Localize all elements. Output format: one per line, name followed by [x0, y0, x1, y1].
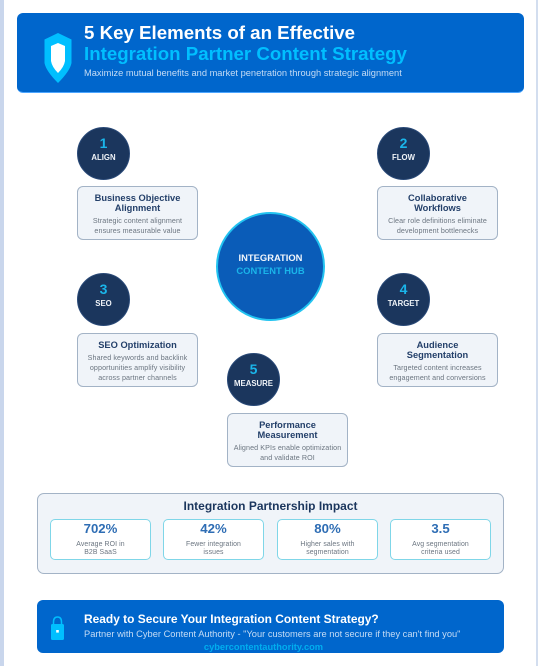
element 5 card: Performance [259, 420, 316, 430]
element 4 badge [377, 273, 430, 326]
element 1 badge [77, 127, 130, 180]
hub label line 2: CONTENT HUB [236, 264, 305, 276]
element 3 badge: 3 [100, 281, 107, 297]
element 2 card: Clear role definitions eliminate [388, 217, 487, 225]
website link: cybercontentauthority.com [204, 642, 323, 652]
element 4 badge: 4 [400, 281, 407, 297]
page side strip left [0, 0, 4, 666]
impact panel [37, 493, 504, 574]
element 1 card: Alignment [115, 202, 160, 212]
header banner [17, 13, 524, 93]
element 5 card: Aligned KPIs enable optimization [234, 444, 341, 452]
title line 2: Integration Partner Content Strategy [84, 42, 407, 64]
hub label line 1: INTEGRATION [239, 252, 302, 262]
stat: 3.5: 3.5 [431, 521, 450, 536]
element 3 card: across partner channels [98, 374, 177, 382]
call to action banner [37, 600, 504, 653]
element 2 card [377, 186, 498, 240]
stat: 3.5 [390, 519, 491, 560]
call to action heading: Ready to Secure Your Integration Content Strategy? [84, 612, 379, 626]
element 1 card [77, 186, 198, 240]
stat: 3.5: criteria used [421, 549, 460, 556]
stat: 702%: 702% [84, 521, 117, 536]
element 5 card: Measurement [258, 430, 317, 440]
stat: 80%: Higher sales with [300, 541, 355, 548]
stat: 80%: segmentation [306, 549, 349, 556]
element 4 badge: TARGET [388, 299, 419, 308]
icon: padlock [51, 616, 64, 640]
element 1 badge: ALIGN [91, 153, 116, 162]
element 3 card: Shared keywords and backlink [88, 354, 187, 362]
element 5 badge [227, 353, 280, 406]
impact heading: Integration Partnership Impact [183, 499, 358, 513]
element 4 card: Targeted content increases [393, 364, 482, 372]
element 1 card: Strategic content alignment [93, 217, 182, 225]
element 4 card [377, 333, 498, 387]
central hub circle [216, 212, 325, 321]
element 3 badge [77, 273, 130, 326]
stat: 42%: issues [203, 549, 224, 556]
element 3 card: opportunities amplify visibility [90, 364, 185, 372]
stat: 702%: B2B SaaS [84, 549, 117, 556]
element 3 card: SEO Optimization [98, 340, 177, 350]
element 3 badge: SEO [95, 299, 112, 308]
element 2 badge: FLOW [392, 153, 415, 162]
stat: 42%: Fewer integration [186, 541, 241, 548]
element 5 card: and validate ROI [260, 454, 315, 462]
page side strip right [536, 0, 538, 666]
stat: 42% [163, 519, 264, 560]
stat: 3.5: Avg segmentation [412, 541, 469, 548]
element 4 card: Audience [417, 340, 458, 350]
subtitle: Maximize mutual benefits and market penetration through strategic alignment [84, 68, 402, 78]
element 5 badge: 5 [250, 361, 257, 377]
title line 1: 5 Key Elements of an Effective [84, 22, 355, 43]
stat: 42%: 42% [200, 521, 227, 536]
element 5 badge: MEASURE [234, 379, 273, 388]
element 1 card: Business Objective [95, 192, 180, 202]
stat: 80%: 80% [314, 521, 341, 536]
element 5 card [227, 413, 348, 467]
element 4 card: Segmentation [407, 350, 468, 360]
element 1 card: ensures measurable value [94, 227, 181, 235]
stat: 80% [277, 519, 378, 560]
element 2 badge: 2 [400, 135, 407, 151]
call to action text: Partner with Cyber Content Authority - "Your customers are not secure if they can't find you" [84, 628, 460, 638]
icon: shield [44, 33, 72, 83]
element 2 card: Collaborative [408, 192, 467, 202]
element 3 card [77, 333, 198, 387]
element 2 card: development bottlenecks [397, 227, 478, 235]
stat: 702%: Average ROI in [76, 541, 125, 548]
element 1 badge: 1 [100, 135, 107, 151]
element 2 badge [377, 127, 430, 180]
stat: 702% [50, 519, 151, 560]
element 2 card: Workflows [414, 202, 461, 212]
element 4 card: engagement and conversions [389, 374, 486, 382]
